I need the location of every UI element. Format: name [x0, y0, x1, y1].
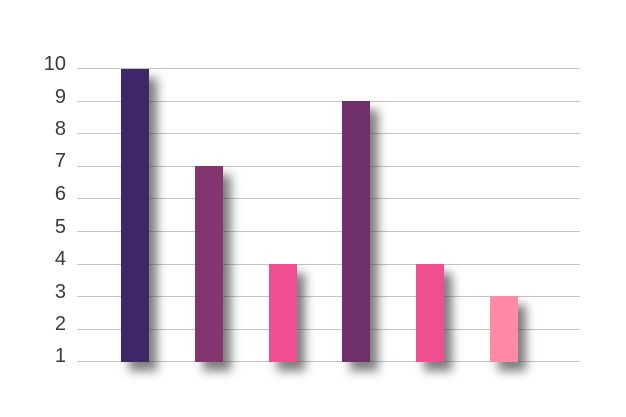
bar: value 4	[416, 264, 444, 362]
bar: value 7	[195, 166, 223, 362]
y-axis labels: 1	[55, 345, 66, 367]
y-axis labels: 2	[55, 313, 66, 335]
y-axis labels	[44, 53, 66, 367]
y-axis labels: 6	[55, 183, 66, 205]
bar: value 4	[269, 264, 297, 362]
y-axis labels: 5	[55, 216, 66, 238]
bar: value 9	[342, 101, 370, 362]
bar: value 3	[490, 296, 518, 362]
y-axis labels: 4	[55, 248, 66, 270]
y-axis labels: 3	[55, 281, 66, 303]
bar: value 10	[121, 69, 149, 362]
y-axis labels: 10	[44, 53, 66, 75]
y-axis labels: 9	[55, 86, 66, 108]
y-axis labels: 8	[55, 118, 66, 140]
y-axis labels: 7	[55, 150, 66, 172]
